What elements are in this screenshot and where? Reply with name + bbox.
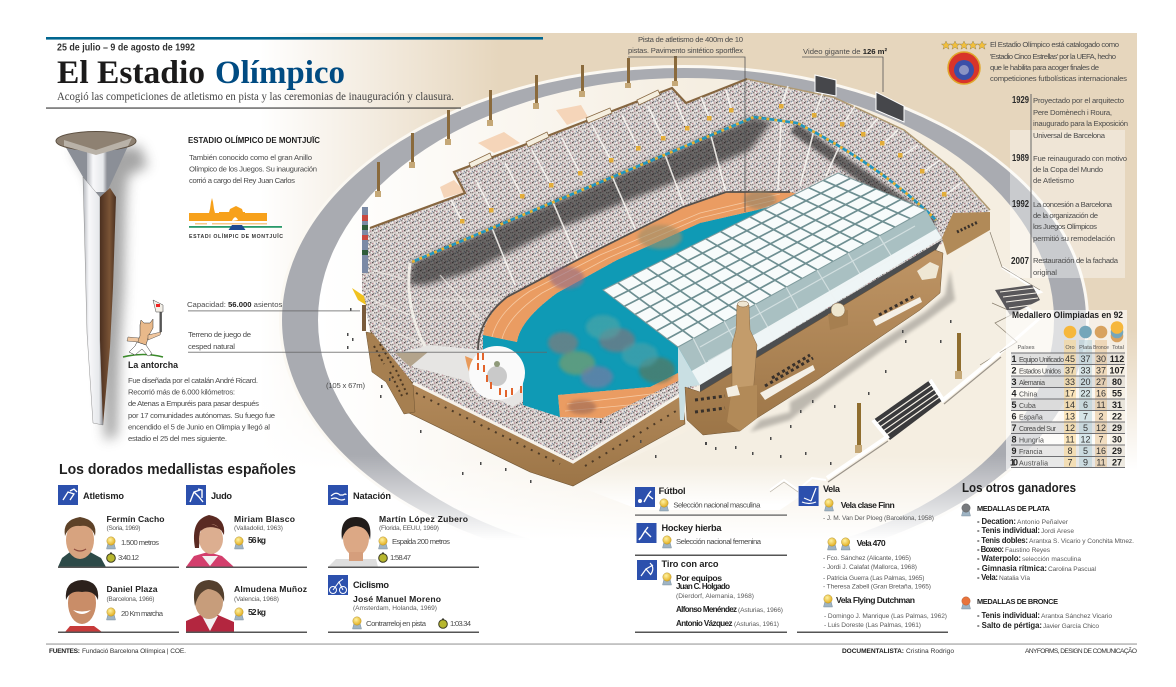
- panel: cycling: 1:03.34: [450, 619, 472, 628]
- panel: medal table: 33: [1080, 366, 1091, 376]
- panel: timeline: de la Copa del Mundo: [1033, 165, 1103, 174]
- text block: stadium description: ESTADIO OLÍMPICO DE MONTJUÏC: [188, 135, 320, 145]
- panel: timeline: original: [1033, 268, 1057, 277]
- text block: UEFA five-star stadium: El Estadio Olímpico está catalogado como: [990, 40, 1119, 49]
- panel: other winners: Faustino Reyes: [1005, 547, 1051, 554]
- panel: athletics: Atletismo: [83, 491, 124, 501]
- panel: timeline: 1992: [1012, 199, 1029, 210]
- panel: medal table: 1: [1011, 354, 1017, 364]
- panel: medal table: 112: [1110, 354, 1124, 364]
- illustration: small figures on the plaza: [347, 308, 952, 483]
- illustration: flags and Olympic flame: [352, 207, 368, 331]
- panel: medal table: Hungría: [1019, 438, 1044, 444]
- panel: medal table: 30: [1112, 434, 1122, 444]
- panel: medal table: 22: [1112, 412, 1122, 422]
- panel: timeline: 1929: [1012, 95, 1029, 106]
- panel: judo: Judo: [211, 491, 232, 501]
- panel: other winners: MEDALLAS DE BRONCE: [977, 597, 1058, 606]
- panel: medal table: Alemania: [1019, 380, 1045, 387]
- panel: other winners: Antonio Peñalver: [1017, 519, 1069, 526]
- icon: Cobi mascot with torch: [123, 300, 163, 357]
- panel: archery: (Dierdorf, Alemania, 1968): [676, 593, 754, 600]
- panel: medal table: 2: [1098, 412, 1104, 422]
- text block: UEFA five-star stadium: [990, 40, 1127, 83]
- panel: timeline: de la organización de: [1033, 211, 1098, 220]
- panel: football: [635, 486, 787, 516]
- panel: medal table: 5: [1083, 423, 1088, 433]
- panel: medal table: 31: [1112, 400, 1122, 410]
- text block: UEFA five-star stadium: competiciones futbolísticas internacionales: [990, 74, 1127, 83]
- panel: archery: Alfonso Menéndez: [676, 605, 737, 614]
- callout: running track description: Pista de atletismo de 400m de 10: [638, 35, 743, 44]
- panel: cycling: José Manuel Moreno: [353, 594, 441, 604]
- footer: [46, 644, 1137, 655]
- panel: football: Selección nacional masculina: [673, 500, 761, 510]
- panel: medal table: 5: [1011, 400, 1017, 410]
- panel: timeline: inaugurado para la Exposición: [1033, 119, 1128, 128]
- panel: other winners: [962, 481, 1134, 630]
- panel: medal table: 7: [1011, 423, 1017, 433]
- panel: athletics: 20 Km marcha: [121, 609, 164, 618]
- illustration: main roof with glass grid: [603, 173, 942, 420]
- panel: medal table: 6: [1011, 412, 1017, 422]
- panel: medal table: 12: [1080, 434, 1091, 444]
- panel: sailing: - Luis Doreste (Las Palmas, 1961): [824, 622, 921, 629]
- panel: medal table: 107: [1109, 366, 1125, 376]
- panel: medal table: 37: [1096, 366, 1106, 376]
- panel: medal table: 11: [1096, 400, 1106, 410]
- panel: other winners: Arantxa Sánchez Vicario: [1041, 613, 1112, 620]
- text block: stadium description: Olímpico de los Juegos. Su inauguración: [189, 164, 317, 174]
- panel: other winners: Los otros ganadores: [962, 481, 1076, 495]
- panel: medal table: 3: [1011, 377, 1017, 387]
- panel: medal table: 80: [1112, 377, 1122, 387]
- panel: medal table: 45: [1065, 354, 1075, 364]
- panel: medal table: 6: [1083, 400, 1088, 410]
- header: top rule: [46, 37, 543, 40]
- panel: archery: Antonio Vázquez: [676, 619, 732, 628]
- title: El Estadio: [57, 55, 205, 91]
- panel: medal table: Plata: [1079, 345, 1093, 351]
- panel: medal table: Corea del Sur: [1019, 426, 1057, 433]
- panel: sailing: - J. M. Van Der Ploeg (Barcelona, 1958): [823, 515, 934, 522]
- text block: UEFA five-star stadium: que le habilita para acoger finales de: [990, 63, 1099, 72]
- panel: sailing: - Domingo J. Manrique (Las Palmas, 1962): [824, 613, 947, 620]
- panel: medal table: 5: [1083, 446, 1088, 456]
- panel: medal table: 20: [1080, 377, 1091, 387]
- panel: timeline: 1989: [1012, 153, 1029, 164]
- panel: sailing: Vela 470: [857, 538, 886, 548]
- text block: stadium description: corrió a cargo del Rey Juan Carlos: [189, 176, 295, 185]
- panel: archery: Juan C. Holgado: [676, 582, 730, 591]
- illustration: building shadow on the plaza: [750, 270, 955, 432]
- panel: medal table: 27: [1112, 458, 1122, 468]
- panel: medal table: 7: [1098, 434, 1104, 444]
- panel: medal table: 12: [1065, 423, 1075, 433]
- text block: la antorcha: estadio el 25 del mes siguiente.: [128, 434, 227, 443]
- panel: medal table: Cuba: [1019, 403, 1036, 410]
- subtitle: Acogió las competiciones de atletismo en pista y las ceremonias de inauguración y clausura.: [57, 91, 454, 103]
- panel: medal table: 10: [1010, 458, 1018, 468]
- panel: timeline: La concesión a Barcelona: [1033, 200, 1113, 209]
- panel: sailing: Vela clase Finn: [841, 500, 895, 510]
- panel: timeline: 2007: [1011, 256, 1029, 267]
- panel: medal table: Medallero Olimpiadas en 92: [1012, 310, 1123, 320]
- panel: sailing: [797, 484, 948, 633]
- panel: archery: (Asturias, 1961): [734, 621, 779, 628]
- panel: football: Fútbol: [659, 486, 686, 496]
- panel: athletics: (Barcelona, 1966): [106, 596, 154, 603]
- panel: medal table: 12: [1096, 423, 1106, 433]
- panel: medal table: 8: [1011, 434, 1017, 444]
- panel: medal table: 8: [1067, 446, 1073, 456]
- footer: FUENTES:: [49, 648, 80, 655]
- panel: judo: 56 kg: [248, 535, 266, 545]
- illustration: ceremony stage with flames: [465, 346, 525, 400]
- panel: sailing: Vela Flying Dutchman: [836, 595, 915, 605]
- panel: other winners: - Salto de pértiga:: [977, 621, 1042, 630]
- icon: Olympic torch: [56, 132, 148, 440]
- panel: medal table: 9: [1011, 446, 1017, 456]
- panel: timeline: Pere Domènech i Roura,: [1033, 108, 1112, 117]
- callout: giant video screen: Video gigante de 126 m²: [803, 47, 888, 56]
- panel: medal table: España: [1019, 414, 1043, 422]
- panel: swimming: Natación: [353, 491, 391, 501]
- panel: medal table: Australia: [1019, 460, 1048, 468]
- icon: Estadi Olímpic de Montjuïc logo: [189, 198, 283, 240]
- text block: stadium description: [188, 135, 320, 185]
- panel: field hockey: Selección nacional femenina: [676, 537, 762, 546]
- panel: other winners: Natalia Vía: [999, 575, 1030, 582]
- panel: other winners: - Boxeo:: [977, 545, 1004, 554]
- illustration: athletes groups on the field: [548, 191, 776, 414]
- illustration: athlete speckles: [548, 191, 776, 414]
- footer: DOCUMENTALISTA:: [842, 648, 904, 655]
- panel: other winners: - Decation:: [977, 517, 1016, 526]
- panel: archery: Tiro con arco: [662, 559, 719, 569]
- panel: archery: (Asturias, 1966): [738, 607, 783, 614]
- panel: medal table: Bronce: [1093, 345, 1109, 351]
- footer: Cristina Rodrigo: [906, 648, 954, 655]
- panel: other winners: Jordi Arese: [1041, 528, 1074, 535]
- title: [57, 55, 345, 91]
- panel: medal table: 37: [1065, 366, 1075, 376]
- callout: natural grass pitch: cesped natural: [188, 342, 235, 351]
- panel: archery: Por equipos: [676, 573, 722, 583]
- panel: other winners: - Gimnasia rítmica:: [977, 564, 1047, 573]
- header: date: 25 de julio – 9 de agosto de 1992: [57, 42, 195, 54]
- footer: ANYFORMS, DESIGN DE COMUNICAÇÃO: [1025, 646, 1137, 655]
- panel: athletics: Fermín Cacho: [106, 514, 164, 524]
- heading: Spanish gold medallists: Los dorados medallistas españoles: [59, 462, 296, 478]
- panel: medal table: 7: [1067, 458, 1073, 468]
- callout: running track description: pistas. Pavimento sintético sportflex: [628, 46, 743, 55]
- panel: medal table: 22: [1080, 388, 1091, 398]
- panel: medal table: 7: [1083, 412, 1088, 422]
- footer: Fundació Barcelona Olímpica | COE.: [82, 648, 186, 655]
- panel: cycling: [328, 575, 479, 633]
- panel: other winners: - Vela:: [977, 573, 998, 582]
- panel: medal table: 11: [1096, 458, 1106, 468]
- panel: judo: (Valencia, 1968): [234, 596, 279, 603]
- panel: medal table: Total: [1112, 345, 1124, 351]
- panel: other winners: MEDALLAS DE PLATA: [977, 504, 1051, 513]
- panel: medal table: 13: [1065, 412, 1075, 422]
- callout: pitch dimensions: (105 x 67m): [326, 381, 365, 390]
- panel: sailing: - Patricia Guerra (Las Palmas, 1965): [823, 575, 924, 582]
- illustration: poles around the stadium: [375, 56, 962, 453]
- chart: athletics field: [483, 190, 880, 417]
- panel: swimming: Espalda 200 metros: [392, 537, 450, 546]
- panel: swimming: Martín López Zubero: [379, 514, 468, 524]
- panel: sailing: - Jordi J. Calafat (Mallorca, 1968): [823, 564, 917, 571]
- callout: running track description: [628, 35, 745, 212]
- text block: la antorcha: encendido el 5 de Junio en Olimpia y llegó al: [128, 422, 270, 432]
- panel: other winners: - Tenis dobles:: [977, 536, 1028, 545]
- callout: capacity: Capacidad: 56.000 asientos: [187, 300, 282, 309]
- panel: medal table: 29: [1112, 423, 1122, 433]
- panel: timeline: Universal de Barcelona: [1033, 131, 1106, 140]
- panel: other winners: Carolina Pascual: [1048, 566, 1097, 573]
- panel: athletics: (Soria, 1969): [106, 525, 140, 532]
- panel: medal table: 4: [1011, 388, 1017, 398]
- callout: natural grass pitch: Terreno de juego de: [188, 330, 251, 339]
- panel: medal table: [1006, 310, 1127, 470]
- chart: running track: [478, 192, 800, 418]
- panel: other winners: - Waterpolo:: [977, 554, 1021, 563]
- panel: field hockey: [635, 523, 787, 556]
- panel: medal table: Estados Unidos: [1019, 368, 1062, 376]
- panel: medal table: Equipo Unificado: [1019, 357, 1064, 364]
- panel: medal table: 37: [1080, 354, 1091, 364]
- panel: cycling: Ciclismo: [353, 580, 389, 590]
- panel: swimming: [328, 485, 479, 568]
- panel: timeline: Fue reinaugurado con motivo: [1033, 154, 1127, 163]
- text block: UEFA five-star stadium: 'Estadio Cinco Estrellas' por la UEFA, hecho: [990, 52, 1116, 61]
- illustration: stadium stands with spectators: [362, 75, 990, 466]
- panel: other winners: - Tenis individual:: [977, 611, 1040, 620]
- text block: stadium description: También conocido como el gran Anillo: [189, 153, 312, 162]
- text block: la antorcha: de Atenas a Empuréis para pasar después: [128, 399, 259, 408]
- panel: timeline: permitió su remodelación: [1033, 234, 1115, 243]
- illustration: plaza stairs and low walls: [770, 285, 1040, 492]
- title: Olímpico: [215, 55, 345, 91]
- panel: medal table: 17: [1065, 388, 1075, 398]
- panel: medal table: Países: [1017, 345, 1035, 351]
- panel: cycling: Contrarreloj en pista: [366, 619, 427, 628]
- callout: giant video screen: [802, 47, 888, 92]
- panel: athletics: [58, 485, 179, 633]
- panel: timeline: Proyectado por el arquitecto: [1033, 96, 1124, 105]
- panel: medal table: 11: [1065, 434, 1075, 444]
- illustration: main building with clock tower: [685, 212, 990, 435]
- icon: five UEFA stars: [941, 41, 987, 49]
- illustration: ceremony area (white walkway and stage): [395, 345, 523, 407]
- panel: judo: Almudena Muñoz: [234, 584, 307, 594]
- panel: field hockey: Hockey hierba: [662, 523, 722, 533]
- text block: la antorcha: Recorrió más de 6.000 kilómetros:: [128, 388, 235, 396]
- beige background panel: [260, 33, 1137, 470]
- text block: la antorcha: Fue diseñada por el catalán André Ricard.: [128, 376, 258, 385]
- panel: sailing: - Fco. Sánchez (Alicante, 1965): [823, 555, 911, 562]
- panel: other winners: selección masculina: [1022, 556, 1081, 563]
- panel: athletics: Daniel Plaza: [106, 584, 158, 594]
- panel: medal table: 30: [1096, 354, 1106, 364]
- panel: medal table: Francia: [1019, 449, 1042, 456]
- panel: other winners: Arantxa S. Vicario y Conchita Mtnez.: [1029, 538, 1134, 545]
- panel: athletics: 1.500 metros: [121, 538, 159, 547]
- panel: timeline: Restauración de la fachada: [1033, 256, 1119, 265]
- panel: medal table: 9: [1083, 458, 1088, 468]
- panel: judo: (Valladolid, 1963): [234, 525, 283, 532]
- icon: Estadi Olímpic de Montjuïc logo: ESTADI OLÍMPIC DE MONTJUÏC: [189, 232, 283, 240]
- panel: cycling: (Amsterdam, Holanda, 1969): [353, 605, 437, 612]
- panel: timeline: de Atletismo: [1033, 176, 1074, 185]
- header: bottom rule: [46, 108, 461, 109]
- panel: medal table: 29: [1112, 446, 1122, 456]
- panel: medal table: 55: [1112, 388, 1122, 398]
- panel: archery: [635, 559, 787, 633]
- panel: medal table: 16: [1096, 388, 1106, 398]
- panel: athletics: 3:40.12: [118, 553, 139, 562]
- panel: other winners: - Tenis individual:: [977, 526, 1040, 535]
- text block: la antorcha: por 17 comunidades autónomas. Su fuego fue: [128, 411, 275, 420]
- illustration: stadium facade wall: [366, 330, 685, 486]
- panel: judo: 52 kg: [248, 607, 266, 617]
- panel: medal table: Oro: [1065, 345, 1075, 351]
- panel: medal table: 27: [1096, 377, 1106, 387]
- panel: sailing: - Theresa Zabell (Gran Bretaña, 1965): [823, 584, 931, 590]
- icon: UEFA badge: [948, 52, 980, 84]
- callout: natural grass pitch: [188, 330, 547, 353]
- panel: judo: [186, 485, 307, 633]
- panel: other winners: Javier García Chico: [1043, 623, 1099, 630]
- panel: sailing: Vela: [823, 484, 841, 494]
- panel: medal table: 14: [1065, 400, 1075, 410]
- panel: medal table: China: [1019, 392, 1037, 398]
- panel: medal table: 2: [1011, 366, 1017, 376]
- text block: la antorcha: [128, 360, 275, 443]
- panel: swimming: (Florida, EEUU, 1969): [379, 525, 439, 532]
- text block: la antorcha: La antorcha: [128, 360, 179, 370]
- panel: medal table: 33: [1065, 377, 1075, 387]
- panel: swimming: 1:58.47: [390, 553, 411, 562]
- panel: timeline: [1010, 94, 1128, 278]
- panel: judo: Miriam Blasco: [234, 514, 295, 524]
- panel: timeline: los Juegos Olímpicos: [1033, 222, 1097, 231]
- panel: medal table: 16: [1096, 446, 1106, 456]
